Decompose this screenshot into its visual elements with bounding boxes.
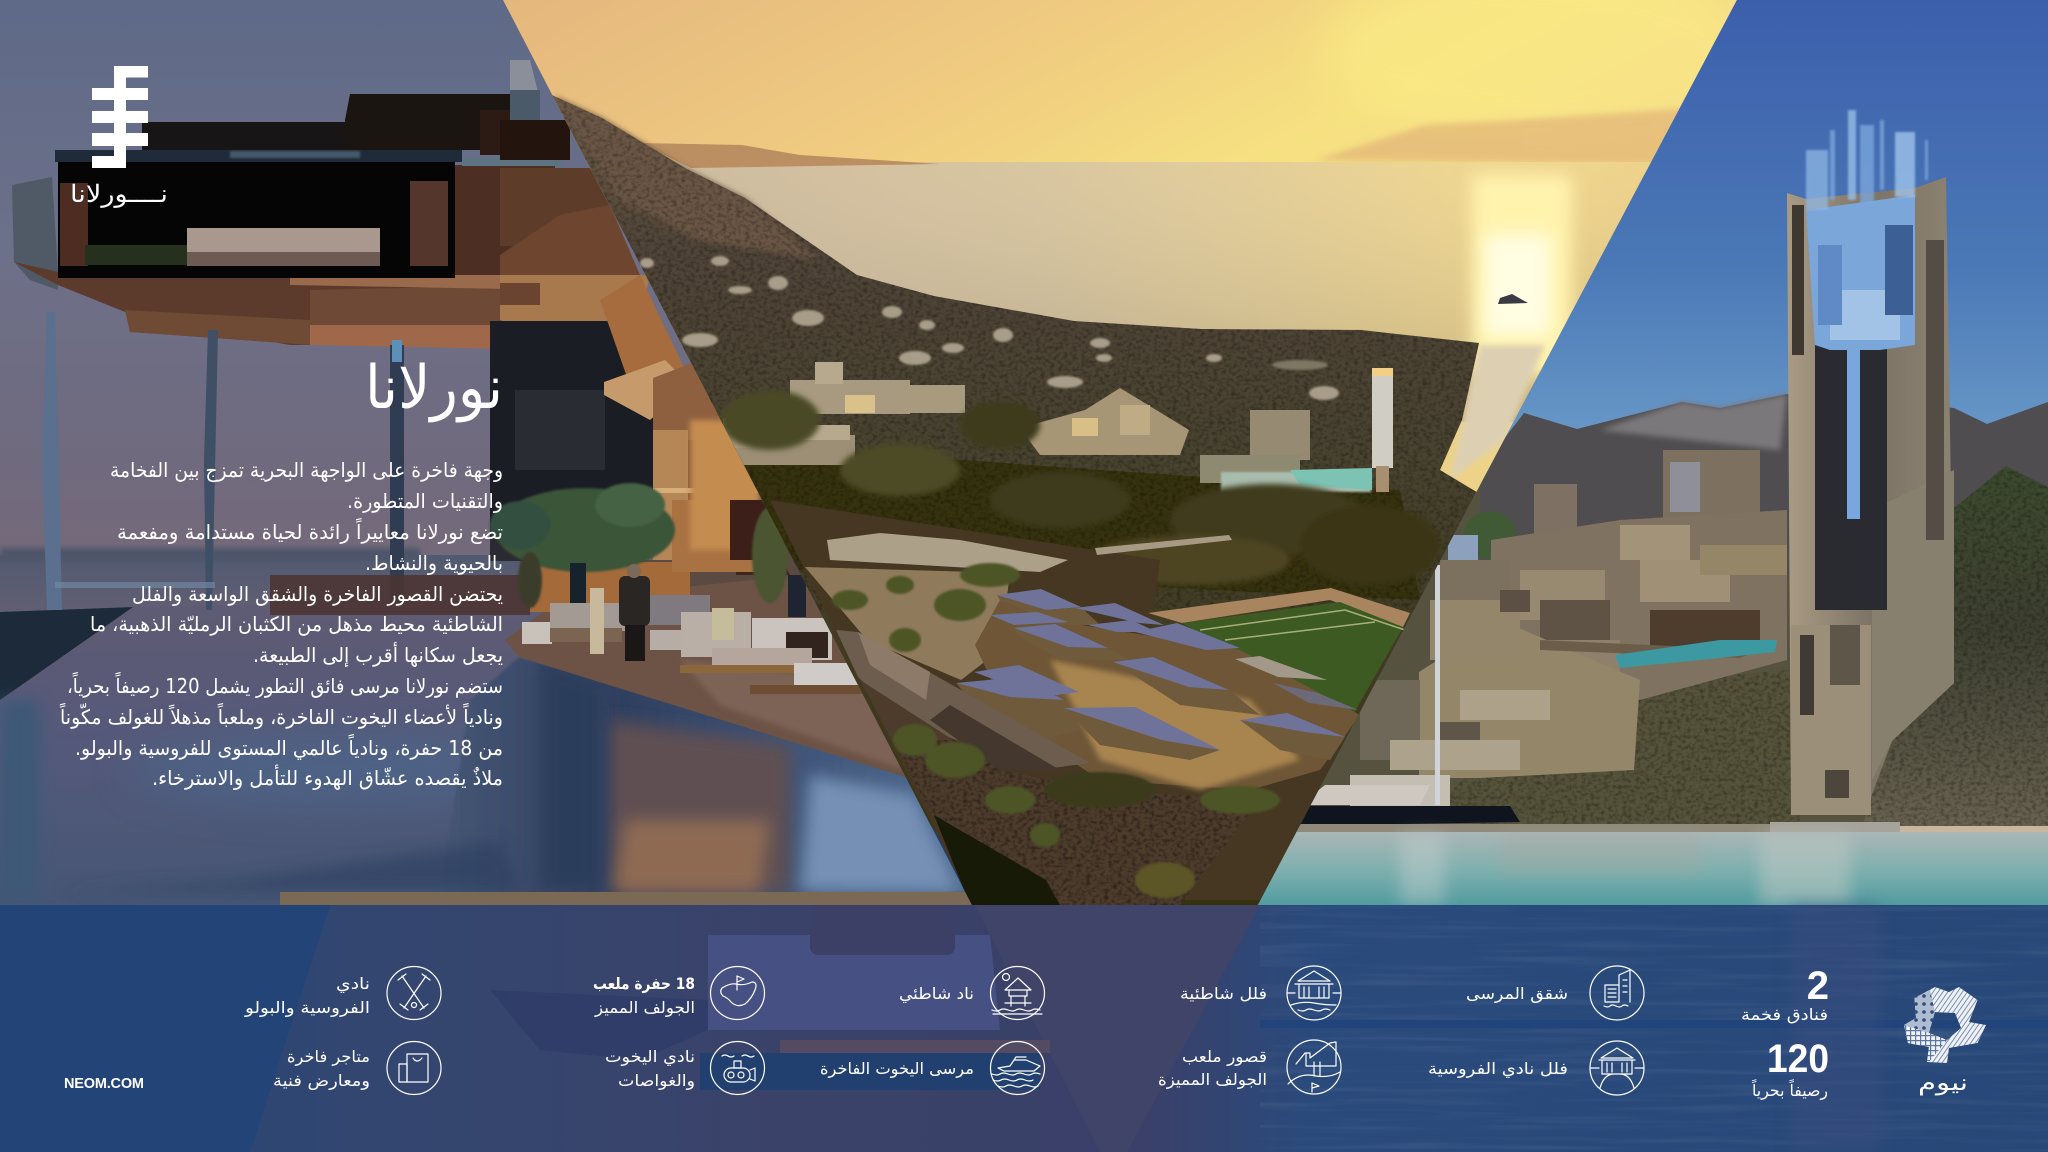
item: golf course: 18 حفرة ملعب xyxy=(593,974,695,993)
tower xyxy=(1787,177,1954,815)
foreground scrub and trees xyxy=(860,680,1280,910)
icon: equestrian villa xyxy=(1590,1041,1644,1095)
stat: luxury hotels: فنادق فخمة xyxy=(1741,1005,1828,1024)
icon: NEOM star emblem xyxy=(1904,987,1986,1063)
item: beach villas: فلل شاطئية xyxy=(1180,984,1267,1003)
item: beach villas xyxy=(1180,966,1341,1020)
tree xyxy=(490,483,788,608)
icon: apartment tower xyxy=(1590,966,1644,1020)
wood tiers and dark block xyxy=(490,168,790,575)
item: equestrian club villas: فلل نادي الفروسية xyxy=(1428,1059,1568,1079)
forest belt xyxy=(720,390,1440,585)
stat: luxury hotels: 2 xyxy=(1807,964,1829,1008)
mountains xyxy=(1480,394,2048,578)
item: golf course: الجولف المميز xyxy=(594,998,695,1018)
item: polo club: الفروسية والبولو xyxy=(244,998,370,1018)
stat: luxury hotels xyxy=(1741,964,1829,1024)
text block: description: والتقنيات المتطورة. xyxy=(347,489,503,513)
text block: description: ونادياً لأعضاء اليخوت الفاخرة، وملعباً مذهلاً للغولف مكّوناً xyxy=(60,703,503,729)
text block: description: تضع نورلانا معاييراً رائدة لحياة مستدامة ومفعمة xyxy=(117,518,503,544)
panel: bottom features band xyxy=(0,905,2048,1152)
item: polo club xyxy=(244,966,441,1020)
harbour water xyxy=(1200,832,2048,907)
icon: submarine xyxy=(710,1042,764,1094)
suspended villa building xyxy=(12,60,570,350)
blue light streaks above tower xyxy=(1806,110,1928,210)
yacht mast and harbour xyxy=(1280,565,2048,833)
item: luxury shops: متاجر فاخرة xyxy=(287,1047,370,1067)
item: luxury yacht marina: مرسى اليخوت الفاخرة xyxy=(820,1059,974,1079)
item: polo club: نادي xyxy=(336,974,370,994)
thin pillars xyxy=(42,312,404,610)
item: yacht and submarine club: والغواصات xyxy=(618,1071,695,1091)
panel: center coast and club scene xyxy=(480,0,1760,910)
logo: NEOM xyxy=(1904,987,1986,1096)
stat: marina berths xyxy=(1751,1037,1829,1101)
panel: right tower and harbour scene xyxy=(1258,0,2048,905)
item: beach club xyxy=(899,966,1044,1020)
item: golf palaces: قصور ملعب xyxy=(1182,1047,1267,1067)
people xyxy=(570,563,806,661)
green hillside xyxy=(1860,466,2048,835)
stat: marina berths: رصيفاً بحرياً xyxy=(1751,1078,1828,1101)
stacked cliff residences xyxy=(1350,450,1787,807)
icon: shopping bags xyxy=(387,1042,441,1094)
item: yacht and submarine club xyxy=(605,1042,764,1094)
text: website: NEOM.COM xyxy=(64,1076,144,1092)
icon: beach hut xyxy=(990,966,1044,1020)
golf and equestrian club xyxy=(770,500,1410,900)
item: equestrian club villas xyxy=(1428,1041,1644,1095)
terrace floor xyxy=(505,575,915,780)
concrete long building xyxy=(836,630,1090,770)
cliff and coastal land xyxy=(500,90,1500,910)
title: نورلانا xyxy=(365,353,503,423)
item: marina apartments xyxy=(1466,966,1644,1020)
icon: crossed polo mallets xyxy=(387,966,441,1020)
item: luxury yacht marina xyxy=(820,1042,1044,1094)
lounge sofas xyxy=(522,595,869,694)
item: luxury shops: ومعارض فنية xyxy=(273,1071,370,1091)
text block: description: من 18 حفرة، ونادياً عالمي المستوى للفروسية والبولو. xyxy=(75,734,503,761)
text block: description: ملاذٌ يقصده عشّاق الهدوء للتأمل والاسترخاء. xyxy=(152,764,503,790)
icon: yacht on waves xyxy=(990,1042,1044,1094)
item: yacht and submarine club: نادي اليخوت xyxy=(605,1047,695,1067)
icon: beach villa xyxy=(1287,966,1341,1020)
text block: description: بالحيوية والنشاط. xyxy=(365,551,503,575)
item: golf palaces: الجولف المميزة xyxy=(1158,1070,1267,1090)
text block: description: يحتضن القصور الفاخرة والشقق الواسعة والفلل xyxy=(132,582,503,606)
far headland xyxy=(640,143,940,168)
text block: description: الشاطئية محيط مذهل من الكثبان الرمليّة الذهبية، ما xyxy=(90,612,503,636)
icon: golf green with flag xyxy=(710,966,764,1020)
scattered white villas xyxy=(640,256,1339,400)
icon: golf palace xyxy=(1287,1040,1341,1094)
text block: description: وجهة فاخرة على الواجهة البحرية تمزج بين الفخامة xyxy=(110,458,503,482)
stat: marina berths: 120 xyxy=(1767,1037,1829,1081)
hillside village clusters xyxy=(723,362,1393,492)
infinity pool xyxy=(60,657,966,892)
panel: left terrace scene xyxy=(0,0,972,905)
item: luxury shops xyxy=(273,1042,441,1094)
item: beach club: ناد شاطئي xyxy=(899,984,974,1004)
item: marina apartments: شقق المرسى xyxy=(1466,984,1568,1004)
logo: NEOM: نيوم xyxy=(1918,1071,1968,1096)
terrace deck surface xyxy=(0,600,560,906)
item: golf palaces xyxy=(1158,1040,1341,1094)
logo: Norlana emblem xyxy=(70,66,168,208)
text block: description xyxy=(60,458,503,790)
cyan glass pool xyxy=(1615,640,1777,668)
text block: description: ستضم نورلانا مرسى فائق التطور يشمل 120 رصيفاً بحرياً، xyxy=(67,672,503,698)
terrace lounge wall xyxy=(270,420,782,615)
sun reflection on sea xyxy=(1450,175,1572,480)
item: golf course xyxy=(593,966,764,1020)
foliage slope xyxy=(1440,670,1800,828)
text block: description: يجعل سكانها أقرب إلى الطبيعة. xyxy=(253,642,503,668)
logo wordmark: نــــورلانا xyxy=(70,180,168,208)
